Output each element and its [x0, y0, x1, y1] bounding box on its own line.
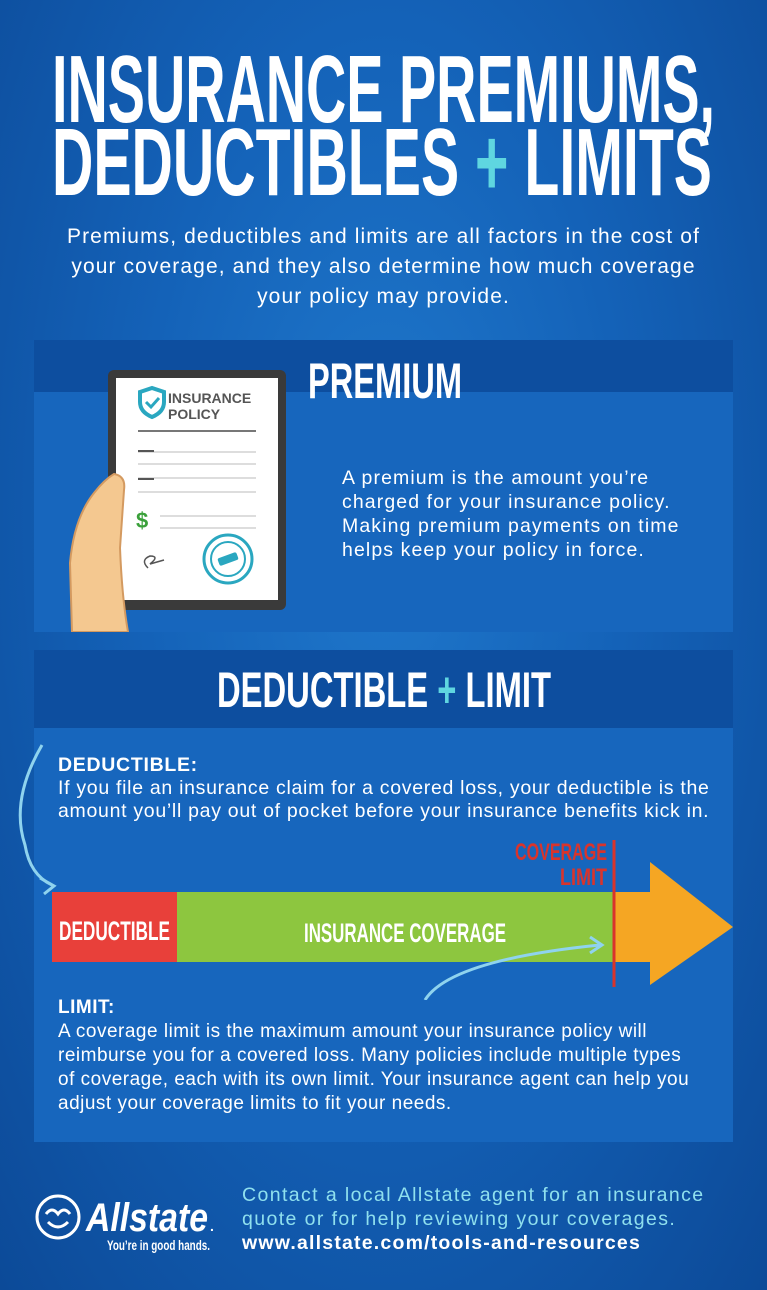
premium description	[342, 467, 680, 561]
orange arrow	[615, 862, 733, 985]
icon: insurance policy tablet with hand: INSURANCE	[168, 390, 251, 406]
limit text block: of coverage, each with its own limit. Your insurance agent can help you	[58, 1069, 689, 1090]
deductible segment	[52, 892, 177, 962]
deductible segment: DEDUCTIBLE	[59, 916, 170, 946]
insurance coverage segment	[177, 892, 615, 962]
premium description: A premium is the amount you’re	[342, 467, 649, 489]
contact text	[242, 1184, 705, 1254]
coverage limit marker: LIMIT	[560, 864, 607, 891]
limit text block: LIMIT:	[58, 997, 115, 1018]
limit text block: reimburse you for a covered loss. Many policies include multiple types	[58, 1045, 681, 1066]
deductible + limit header band	[34, 650, 733, 728]
icon: insurance policy tablet with hand: POLICY	[168, 406, 221, 422]
logo: Allstate: .	[210, 1218, 214, 1234]
deductible text block: If you file an insurance claim for a covered loss, your deductible is the	[58, 777, 710, 799]
insurance coverage segment: INSURANCE COVERAGE	[304, 918, 506, 948]
arrow: deductible curve	[20, 745, 54, 894]
limit text block: A coverage limit is the maximum amount your insurance policy will	[58, 1021, 647, 1042]
premium description: helps keep your policy in force.	[342, 539, 645, 561]
premium description: Making premium payments on time	[342, 515, 680, 537]
limit text block: adjust your coverage limits to fit your needs.	[58, 1093, 452, 1114]
chart: coverage bar	[18, 744, 733, 1000]
contact text: Contact a local Allstate agent for an insurance	[242, 1184, 705, 1206]
deductible text block: amount you’ll pay out of pocket before your insurance benefits kick in.	[58, 800, 709, 822]
icon: insurance policy tablet with hand: $	[136, 508, 148, 533]
intro text: your policy may provide.	[257, 285, 510, 308]
icon: insurance policy tablet with hand	[69, 370, 286, 632]
arrow: limit curve	[425, 937, 602, 1000]
coverage limit marker: COVERAGE	[515, 839, 607, 866]
intro text: your coverage, and they also determine how much coverage	[71, 255, 696, 278]
contact text: quote or for help reviewing your coverages.	[242, 1208, 676, 1230]
premium header band	[34, 340, 733, 392]
panel: deductible + limit	[34, 650, 733, 1142]
logo: Allstate	[36, 1194, 214, 1253]
intro text	[67, 225, 700, 308]
contact text: www.allstate.com/tools-and-resources	[242, 1232, 641, 1254]
premium description: charged for your insurance policy.	[342, 491, 671, 513]
deductible text block: DEDUCTIBLE:	[58, 754, 198, 776]
deductible text block	[58, 754, 710, 822]
coverage limit marker	[515, 839, 614, 987]
title	[52, 36, 715, 205]
limit text block	[58, 997, 689, 1114]
panel: premium	[34, 340, 733, 632]
intro text: Premiums, deductibles and limits are all factors in the cost of	[67, 225, 700, 248]
